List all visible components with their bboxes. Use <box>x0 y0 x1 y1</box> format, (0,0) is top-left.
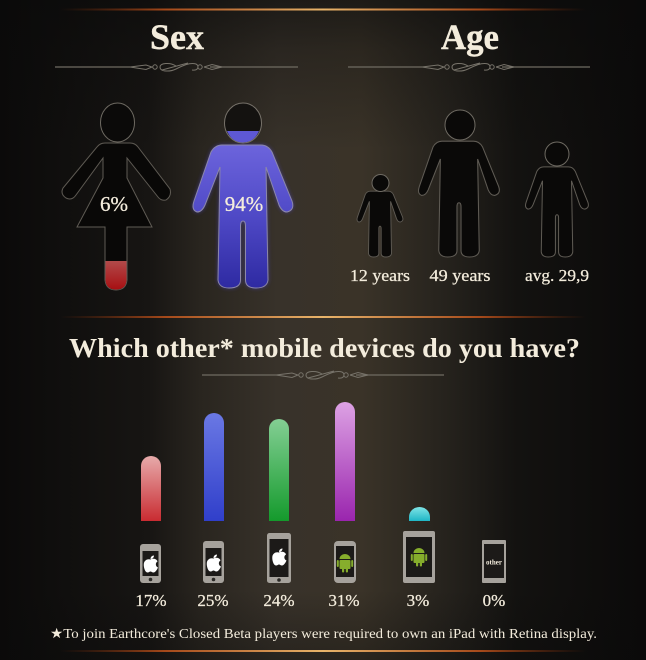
percent labels: 17% <box>135 591 167 610</box>
label: 94%: 94% <box>225 192 263 216</box>
apple logo <box>207 554 221 572</box>
ornament divider: devices <box>202 371 444 379</box>
bottom divider line <box>60 650 586 652</box>
label: other: other <box>486 558 502 566</box>
heading: devices question: Which other* mobile devices do you have? <box>69 333 580 363</box>
percent labels <box>135 591 505 610</box>
percent labels: 24% <box>263 591 295 610</box>
label: 6%: 6% <box>100 192 128 216</box>
icon: other device <box>482 540 506 583</box>
apple logo <box>144 556 158 572</box>
icon: Android tablet <box>403 531 435 583</box>
bar: 31% <box>335 402 355 521</box>
bar: 24% <box>269 419 289 521</box>
android logo <box>337 554 353 572</box>
label: 49 years: 49 years <box>430 266 490 285</box>
figure: female 6% <box>62 103 170 290</box>
icon: small iPhone <box>140 544 161 583</box>
icon: Android phone <box>334 541 356 583</box>
bar: 17% <box>141 456 161 521</box>
apple logo <box>272 548 286 566</box>
figure: 49 years <box>418 110 499 257</box>
android logo <box>411 548 427 566</box>
percent labels: 3% <box>407 591 429 610</box>
heading: Age: Age <box>441 17 499 57</box>
label: 12 years: 12 years <box>350 266 410 285</box>
footnote: ★To join Earthcore's Closed Beta players were required to own an iPad with Retina display. <box>50 627 597 642</box>
percent labels: 0% <box>483 591 505 610</box>
figure: male 94% <box>193 103 293 288</box>
icon: iPhone tall <box>203 541 224 583</box>
red fill: leg <box>106 261 126 290</box>
label: average age: avg. 29,9 <box>525 266 589 285</box>
percent labels: 31% <box>328 591 360 610</box>
bar: 25% <box>204 413 224 521</box>
blue fill: head <box>227 131 259 142</box>
icon: iPad mini <box>267 533 291 583</box>
ornament divider: Age <box>348 63 590 71</box>
ornament divider: Sex <box>55 63 298 71</box>
bar chart: devices <box>141 402 430 521</box>
middle divider line <box>60 316 586 318</box>
percent labels: 25% <box>197 591 229 610</box>
top divider line <box>60 8 586 10</box>
heading: Sex: Sex <box>150 17 204 57</box>
figure: 12 years <box>357 174 403 257</box>
bar: 3% <box>409 507 430 521</box>
figure: average <box>526 142 588 257</box>
